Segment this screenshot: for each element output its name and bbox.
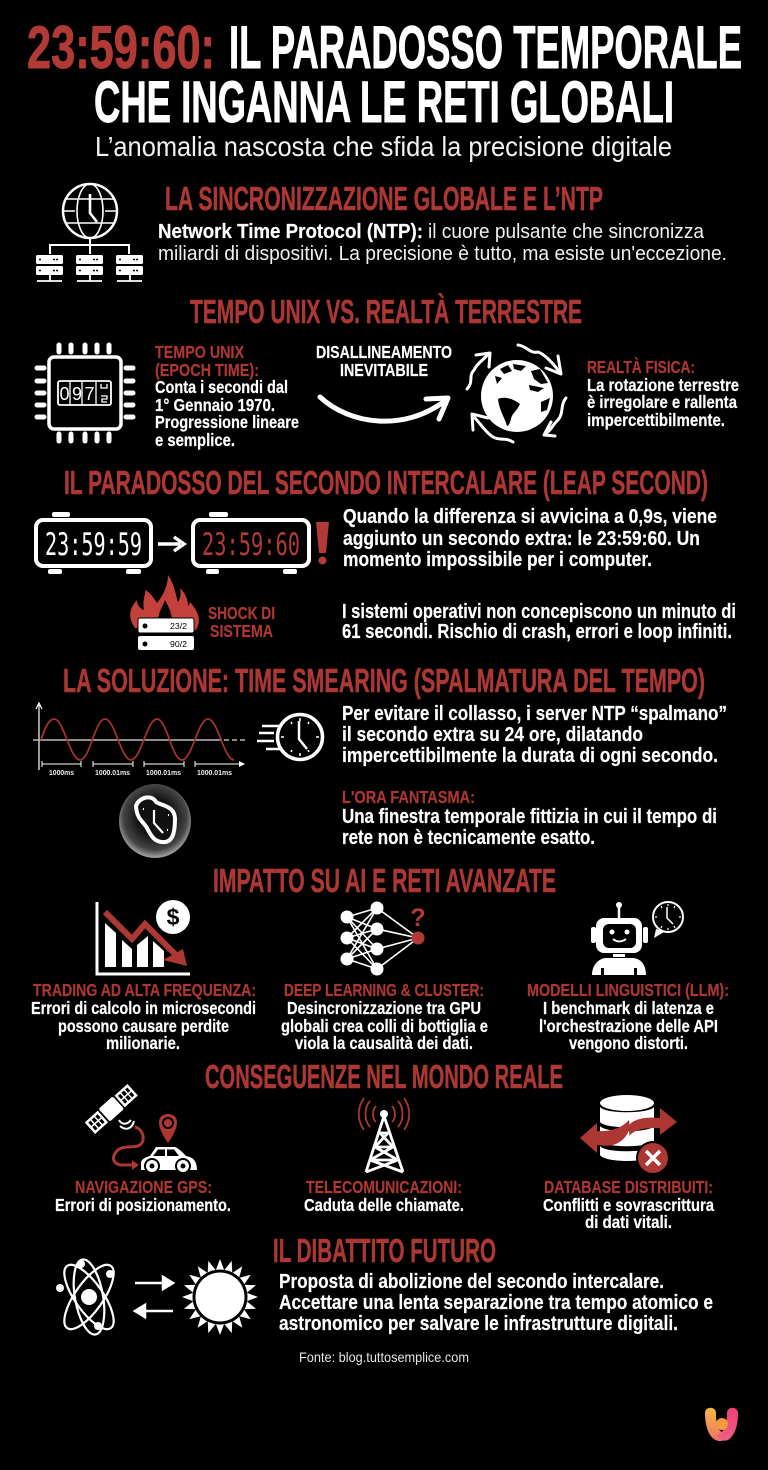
title: 23:59:60: (27, 14, 215, 81)
panel: time smearing (33, 662, 727, 858)
text: tempo unix: Progressione lineare (155, 412, 299, 432)
column: LLM: l'orchestrazione delle API (539, 1016, 718, 1036)
text: realtà fisica: impercettibilmente. (587, 410, 725, 430)
text: proposta (279, 1270, 713, 1335)
chart: sine wave seconds (33, 703, 245, 777)
chart: sine wave seconds: 1000.01ms (95, 770, 130, 777)
icon: logo (705, 1408, 738, 1441)
column: trading (31, 980, 256, 1053)
icon: earth with arrows (467, 345, 566, 442)
text: tempo unix: (EPOCH TIME): (155, 360, 259, 380)
column: trading: Errori di calcolo in microsecondi (31, 998, 256, 1018)
column: telecomunicazioni: Caduta delle chiamate. (304, 1195, 464, 1215)
icon: sun (182, 1259, 258, 1335)
column: database: di dati vitali. (585, 1212, 672, 1232)
icon: globe clock and servers (36, 184, 143, 281)
column: trading: milionarie. (106, 1033, 180, 1053)
text: disallineamento: INEVITABILE (340, 360, 428, 380)
text: differenza: momento impossibile per i computer. (343, 548, 652, 571)
column: GPS: NAVIGAZIONE GPS: (75, 1177, 212, 1197)
icon: falling chart with dollar (97, 900, 190, 974)
chart: sine wave seconds: 1000.01ms (146, 770, 181, 777)
text: disallineamento (316, 342, 452, 380)
text: sistemi operativi (342, 600, 736, 643)
icon: neural network: ? (410, 904, 426, 932)
text: ora fantasma: L'ORA FANTASMA: (342, 787, 475, 807)
text: disallineamento: DISALLINEAMENTO (316, 342, 452, 362)
text: tempo unix: TEMPO UNIX (155, 342, 244, 362)
text: shock di sistema (208, 603, 275, 641)
icon: database conflict (580, 1095, 677, 1174)
column: trading: possono causare perdite (58, 1016, 229, 1036)
text: per evitare (342, 702, 727, 767)
panel: NTP (36, 180, 727, 281)
icon: server on fire (130, 575, 199, 650)
panel: Unix vs realtà (37, 293, 739, 450)
column: GPS: Errori di posizionamento. (55, 1195, 231, 1215)
icon: fast clock (257, 714, 322, 760)
text: differenza (343, 505, 717, 571)
column: telecomunicazioni: TELECOMUNICAZIONI: (306, 1177, 462, 1197)
text: tempo unix: e semplice. (155, 430, 235, 450)
chart: sine wave seconds: 1000.01ms (197, 770, 232, 777)
panel: secondo intercalare (36, 464, 736, 650)
text: realtà fisica: è irregolare e rallenta (587, 392, 737, 412)
arrow: clock transition (158, 537, 184, 551)
icon: server on fire: 90/2 (170, 640, 188, 649)
chart: sine wave seconds: 1000ms (49, 770, 74, 777)
text: shock di sistema: SHOCK DI (208, 603, 275, 623)
icon: exclamation mark (316, 522, 329, 564)
column: deep learning: Desincronizzazione tra GPU (287, 998, 481, 1018)
icon: server on fire: 23/2 (170, 622, 188, 631)
text: realtà fisica: REALTÀ FISICA: (587, 356, 695, 377)
arrow: sun to atom (135, 1305, 173, 1317)
column: deep learning (281, 980, 488, 1053)
icon: chip with counter (37, 345, 133, 441)
column: telecomunicazioni (304, 1177, 464, 1215)
text: proposta: astronomico per salvare le infrastrutture digitali. (279, 1312, 678, 1335)
arrow: atom to sun (135, 1277, 173, 1289)
icon: atom (56, 1257, 122, 1337)
icon: digital clock 23:59:60: 23:59:60 (202, 527, 300, 563)
text: NTP description: il cuore pulsante che sincronizza (428, 220, 705, 243)
text: ora fantasma: rete non è tecnicamente esatto. (342, 826, 595, 849)
icon: falling chart with dollar: $ (167, 904, 180, 930)
column: deep learning: DEEP LEARNING & CLUSTER: (284, 980, 484, 1000)
column: database: DATABASE DISTRIBUITI: (544, 1177, 713, 1197)
column: LLM: vengono distorti. (569, 1033, 688, 1053)
column: LLM (527, 980, 729, 1053)
subtitle: L’anomalia nascosta che sfida la precisione digitale (95, 131, 672, 162)
text: realtà fisica (587, 356, 739, 430)
column: LLM: MODELLI LINGUISTICI (LLM): (527, 980, 729, 1000)
icon: digital clock 23:59:59 (36, 512, 151, 574)
panel: impatto AI (31, 862, 729, 1053)
text: per evitare: il secondo extra su 24 ore, dilatando (342, 723, 643, 746)
text: shock di sistema: SISTEMA (210, 621, 273, 641)
icon: digital clock 23:59:59: 23:59:59 (45, 527, 142, 563)
icon: melting clock in bubble (119, 784, 191, 858)
icon: cell tower (359, 1098, 409, 1172)
column: GPS (55, 1177, 231, 1215)
heading: impatto: IMPATTO SU AI E RETI AVANZATE (213, 862, 556, 899)
text: tempo unix: 1° Gennaio 1970. (155, 395, 275, 415)
text: proposta: Proposta di abolizione del secondo intercalare. (279, 1270, 664, 1293)
column: database: Conflitti e sovrascrittura (543, 1195, 714, 1215)
panel: dibattito futuro (56, 1232, 713, 1365)
text: differenza: aggiunto un secondo extra: le 23:59:60. Un (343, 527, 700, 550)
column: LLM: I benchmark di latenza e (543, 998, 714, 1018)
icon: robot with clock bubble (591, 902, 683, 975)
column: database (543, 1177, 714, 1232)
text: NTP description (158, 220, 727, 265)
text: realtà fisica: La rotazione terrestre (587, 375, 739, 395)
heading: dibattito: IL DIBATTITO FUTURO (273, 1232, 496, 1269)
text: tempo unix (155, 342, 299, 450)
icon: neural network (340, 902, 426, 976)
icon: chip with counter: 097 (60, 384, 94, 404)
text: NTP description: miliardi di dispositivi. La precisione è tutto, ma esiste un'eccezione. (158, 242, 727, 265)
text: ora fantasma (342, 787, 717, 849)
title (27, 14, 742, 135)
source: Fonte: blog.tuttosemplice.com (299, 1349, 469, 1365)
icon: satellite, pin and car (85, 1084, 197, 1173)
text: NTP description: Network Time Protocol (NTP): (158, 220, 423, 243)
column: deep learning: globali crea colli di bottiglia e (281, 1016, 488, 1036)
arrow: curved (320, 397, 448, 421)
text: tempo unix: Conta i secondi dal (155, 377, 288, 397)
column: deep learning: viola la causalità dei dati. (295, 1033, 473, 1053)
panel: conseguenze (55, 1058, 714, 1232)
column: trading: TRADING AD ALTA FREQUENZA: (33, 980, 256, 1000)
icon: digital clock 23:59:60 (193, 512, 309, 574)
